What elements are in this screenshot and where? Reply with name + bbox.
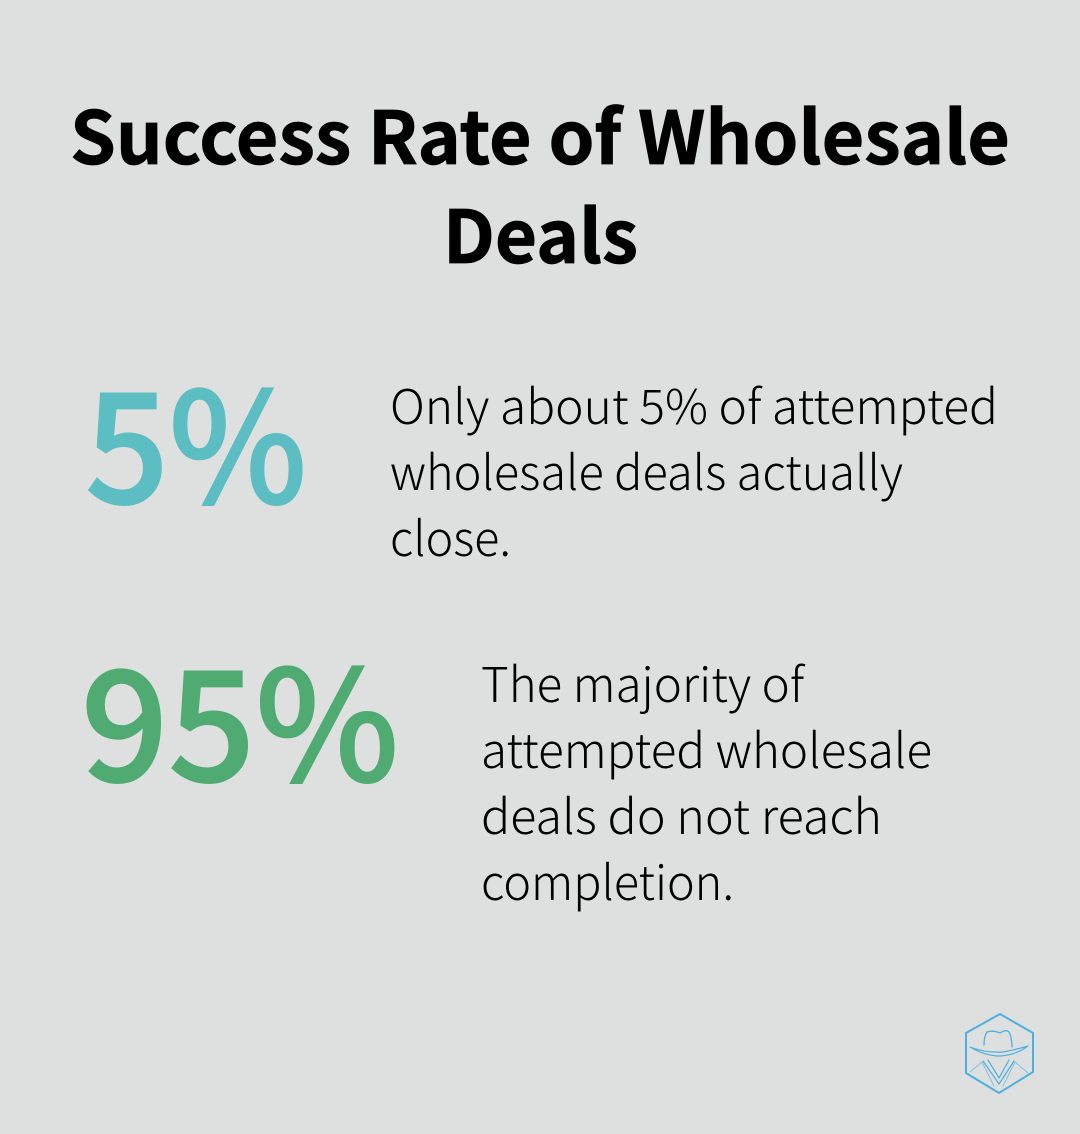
text block: 5% description — [390, 368, 998, 570]
text block: 95% description — [481, 646, 932, 914]
text block: 95% description: deals do not reach — [481, 778, 882, 848]
text block: 5% description: close. — [390, 500, 511, 570]
text block: 95% description: attempted wholesale — [481, 712, 932, 782]
title — [70, 80, 1010, 285]
title: Success Rate of Wholesale — [70, 80, 1010, 186]
text block: 95% description: The majority of — [481, 646, 806, 716]
stat: 95%: 95% — [81, 605, 399, 826]
stat: 5%: 5% — [85, 327, 307, 548]
title: Deals — [443, 179, 638, 285]
text block: 95% description: completion. — [481, 844, 734, 914]
text block: 5% description: wholesale deals actually — [390, 434, 903, 504]
icon: logo hexagon with hat and collar — [966, 1014, 1033, 1093]
text block: 5% description: Only about 5% of attempted — [390, 368, 998, 438]
